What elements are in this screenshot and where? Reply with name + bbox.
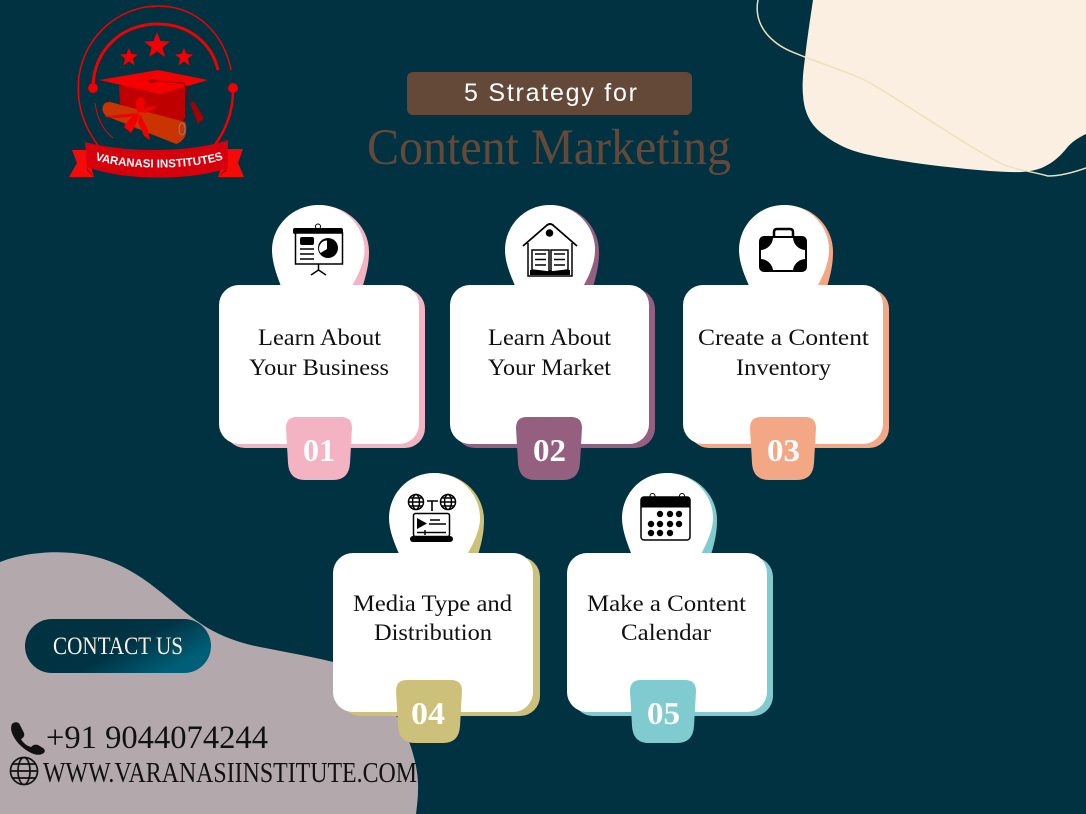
- card body: [219, 285, 419, 444]
- teardrop shadow: [667, 473, 717, 558]
- teardrop: [739, 205, 829, 290]
- icon: briefcase: [759, 229, 807, 272]
- icon: calendar: [641, 494, 690, 540]
- card 02: [450, 205, 655, 480]
- card text: [587, 591, 747, 645]
- card text: Media Type and: [353, 591, 513, 616]
- card text: Your Business: [249, 355, 389, 380]
- icon: house with book: [523, 224, 577, 276]
- title line 1: 5 Strategy for: [464, 79, 637, 107]
- title badge: [407, 72, 692, 115]
- card text: [488, 325, 612, 380]
- card shadow: [225, 289, 425, 448]
- card text: Your Market: [488, 355, 612, 380]
- number tag 01: [286, 417, 352, 480]
- logo dots: [88, 83, 238, 93]
- card shadow: [455, 289, 655, 448]
- logo cap: [99, 70, 208, 128]
- card body: [683, 285, 883, 444]
- card text: Make a Content: [587, 591, 747, 616]
- card text: Distribution: [374, 620, 493, 645]
- logo name: VARANASI INSTITUTES: [97, 152, 222, 168]
- logo stars: [120, 32, 193, 66]
- number 02: 02: [533, 432, 566, 468]
- teardrop: [389, 473, 480, 558]
- contact us button: [25, 619, 211, 673]
- card text: Calendar: [621, 620, 711, 645]
- icon: presentation board: [293, 224, 343, 275]
- number tag 05: [630, 680, 696, 743]
- button label: CONTACT US: [53, 633, 183, 660]
- card text: Learn About: [488, 325, 612, 350]
- teardrop shadow: [434, 473, 484, 558]
- card text: Create a Content: [698, 325, 870, 350]
- card text: [698, 325, 870, 380]
- card shadow: [689, 289, 889, 448]
- number 04: 04: [411, 695, 445, 731]
- icon: media laptop with globes: [408, 494, 456, 542]
- teardrop shadow: [318, 205, 369, 290]
- teardrop: [622, 473, 713, 558]
- icon: globe: [10, 758, 38, 784]
- number tag 04: [396, 680, 462, 743]
- card shadow: [340, 557, 540, 716]
- card body: [333, 553, 533, 712]
- card body: [450, 285, 649, 444]
- website: WWW.VARANASIINSTITUTE.COM: [43, 757, 417, 789]
- teardrop shadow: [784, 205, 833, 290]
- teardrop: [272, 205, 364, 290]
- logo banner: [69, 140, 244, 178]
- number tag 02: [516, 417, 582, 480]
- number 05: 05: [647, 695, 680, 731]
- logo: Varanasi Institutes: [69, 5, 244, 178]
- card body: [567, 553, 767, 712]
- logo scroll: [102, 97, 186, 144]
- card text: Inventory: [736, 355, 832, 380]
- card text: Learn About: [258, 325, 382, 350]
- teardrop: [505, 205, 595, 290]
- teardrop shadow: [550, 205, 599, 290]
- phone number: +91 9044074244: [46, 720, 268, 756]
- cream blob top right: [803, 0, 1086, 172]
- cream outline curve: [757, 0, 1086, 176]
- logo rings: [78, 6, 233, 148]
- number 03: 03: [767, 432, 800, 468]
- card shadow: [573, 557, 773, 716]
- card 01: [219, 205, 425, 480]
- card 04: [333, 473, 540, 743]
- number 01: 01: [303, 432, 335, 468]
- icon: phone: [11, 722, 45, 755]
- card text: [353, 591, 513, 645]
- grey blob bottom left: [0, 552, 418, 814]
- card 03: [683, 205, 889, 480]
- card 05: [567, 473, 773, 743]
- card text: [249, 325, 389, 380]
- number tag 03: [750, 417, 816, 480]
- title line 2: Content Marketing: [367, 120, 731, 176]
